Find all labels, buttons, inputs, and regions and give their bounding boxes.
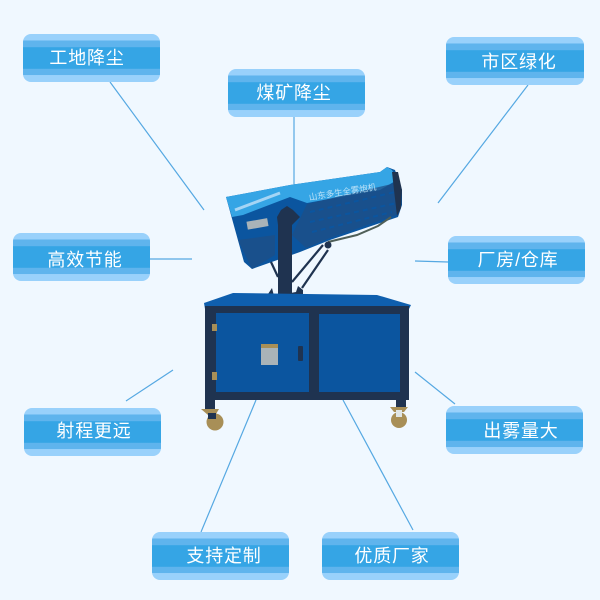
label: 煤矿降尘: 煤矿降尘 (256, 83, 332, 103)
support post (277, 206, 300, 295)
connector lines (110, 82, 528, 532)
cabinet frame (205, 306, 409, 400)
table top (204, 293, 411, 309)
label: 厂房/仓库: 厂房/仓库 (477, 250, 559, 270)
right caster (390, 407, 408, 428)
machine: fog cannon (201, 167, 411, 430)
door handle (298, 346, 303, 361)
right door (319, 314, 400, 392)
legs (205, 400, 406, 409)
base clamp (268, 286, 303, 301)
label: 高效节能: 高效节能 (47, 250, 123, 270)
left caster (201, 409, 224, 430)
label: 厂房/仓库 (448, 236, 585, 284)
label: 支持定制 (152, 532, 289, 580)
label: 优质厂家: 优质厂家 (354, 546, 430, 566)
label: 支持定制: 支持定制 (186, 546, 262, 566)
nameplate (246, 218, 269, 230)
label: 出雾量大 (446, 406, 583, 454)
door label (261, 344, 278, 365)
label: 射程更远: 射程更远 (56, 421, 132, 441)
left door (216, 313, 309, 392)
hinges (212, 324, 217, 380)
label: 射程更远 (24, 408, 161, 456)
label: 工地降尘 (23, 34, 160, 82)
label: 高效节能 (13, 233, 150, 281)
label: 工地降尘: 工地降尘 (49, 48, 125, 68)
label: 优质厂家 (322, 532, 459, 580)
label: 市区绿化: 市区绿化 (481, 52, 557, 72)
label: 市区绿化 (446, 37, 584, 85)
cannon barrel (226, 167, 402, 269)
label: 煤矿降尘 (228, 69, 365, 117)
hoses (328, 217, 391, 242)
barrel lettering: 山东多生全雾炮机 (308, 182, 377, 202)
label: 出雾量大: 出雾量大 (483, 421, 559, 441)
